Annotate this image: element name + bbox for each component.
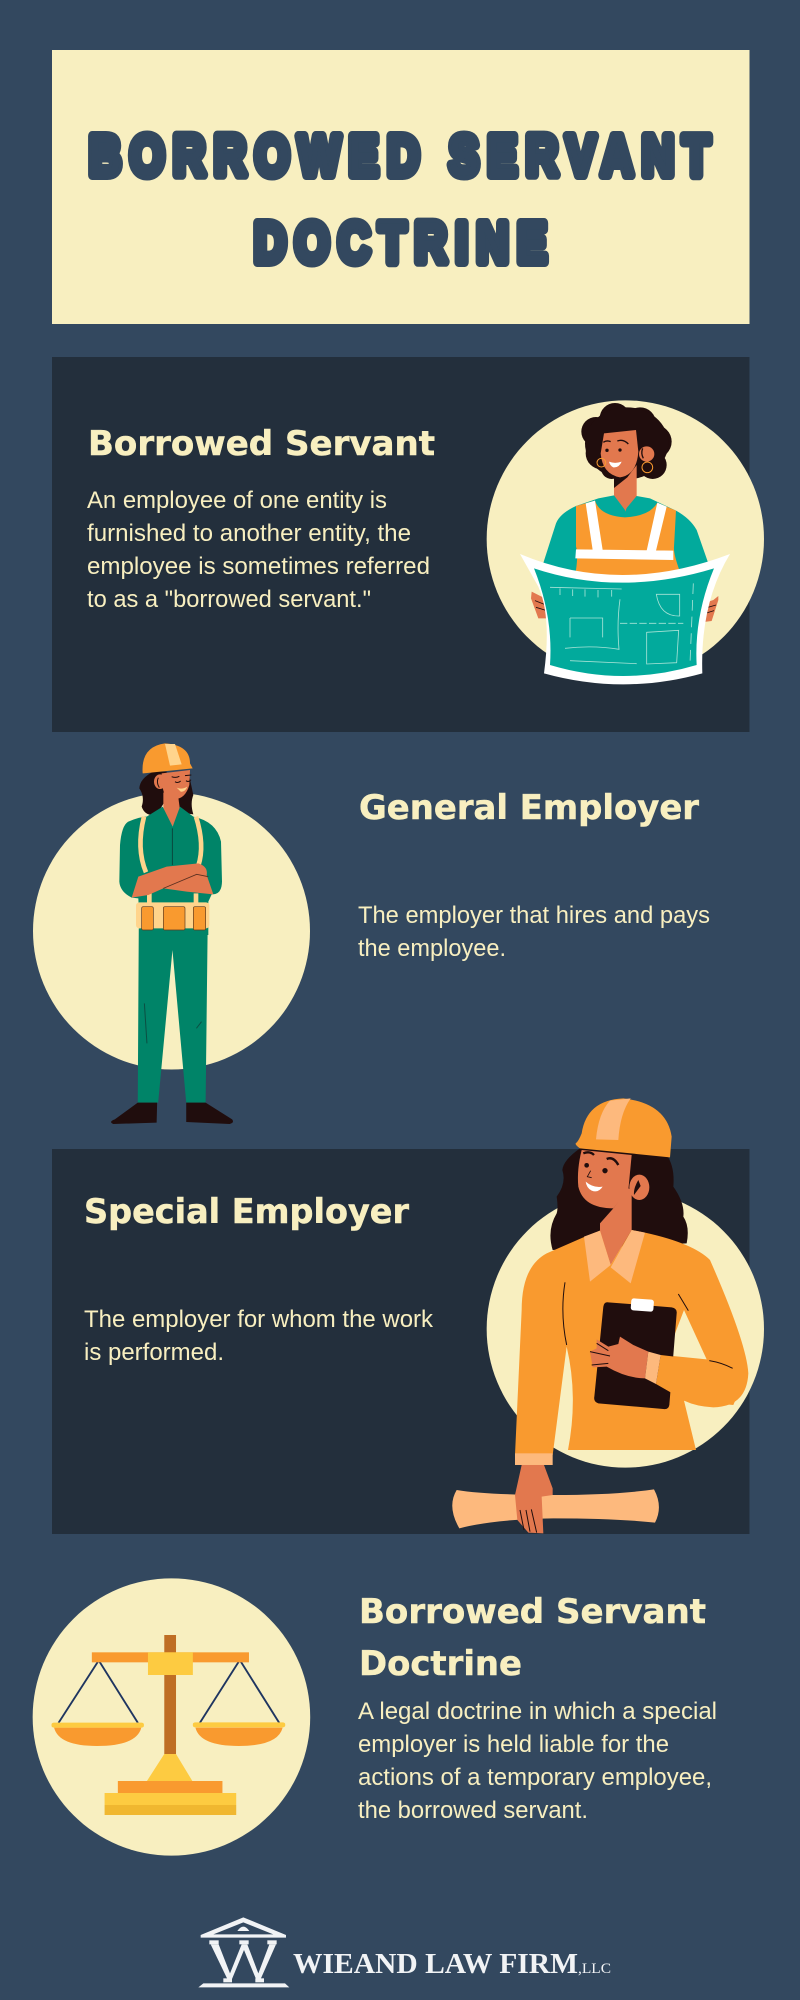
heading: borrowed servant doctrine — [359, 1592, 706, 1684]
text: borrowed servant description — [87, 487, 430, 613]
heading: borrowed servant doctrine: Borrowed Servant — [359, 1592, 706, 1632]
heading: borrowed servant: Borrowed Servant — [88, 424, 435, 464]
logo: law firm building icon — [198, 1917, 289, 1987]
text: borrowed servant description: An employee of one entity is — [87, 487, 387, 514]
title text: DOCTRINE — [254, 211, 547, 274]
text: special employer description: is performed. — [84, 1339, 224, 1366]
icon: worker with crossed arms in circle — [33, 743, 310, 1124]
panel: borrowed servant — [52, 357, 750, 732]
text: general employer description: The employer that hires and pays — [358, 902, 710, 929]
text: special employer description: The employer for whom the work — [84, 1306, 434, 1333]
text: borrowed servant description: furnished to another entity, the — [87, 520, 411, 547]
text: borrowed servant doctrine description — [358, 1698, 717, 1824]
icon: scales of justice in circle — [33, 1578, 310, 1856]
title text: BORROWED SERVANT — [89, 124, 710, 187]
text: borrowed servant doctrine description: A legal doctrine in which a special — [358, 1698, 717, 1725]
panel: special employer — [52, 1149, 750, 1534]
text: borrowed servant description: employee is sometimes referred — [87, 553, 430, 580]
text: borrowed servant doctrine description: actions of a temporary employee, — [358, 1764, 712, 1791]
logo: law firm name: ,LLC — [578, 1961, 611, 1977]
text: special employer description — [84, 1306, 434, 1366]
icon: worker with clipboard in circle — [452, 1098, 764, 1533]
text: borrowed servant doctrine description: the borrowed servant. — [358, 1797, 588, 1824]
logo: law firm name: WIEAND LAW FIRM — [293, 1948, 578, 1980]
icon: worker with blueprint in circle — [487, 400, 764, 684]
text: general employer description — [358, 902, 710, 962]
heading: special employer: Special Employer — [84, 1192, 409, 1232]
title text — [89, 124, 710, 274]
heading: general employer: General Employer — [359, 788, 699, 828]
text: borrowed servant doctrine description: employer is held liable for the — [358, 1731, 669, 1758]
text: borrowed servant description: to as a "borrowed servant." — [87, 586, 371, 613]
panel: title — [52, 50, 750, 324]
heading: borrowed servant doctrine: Doctrine — [359, 1644, 522, 1684]
text: general employer description: the employee. — [358, 935, 506, 962]
